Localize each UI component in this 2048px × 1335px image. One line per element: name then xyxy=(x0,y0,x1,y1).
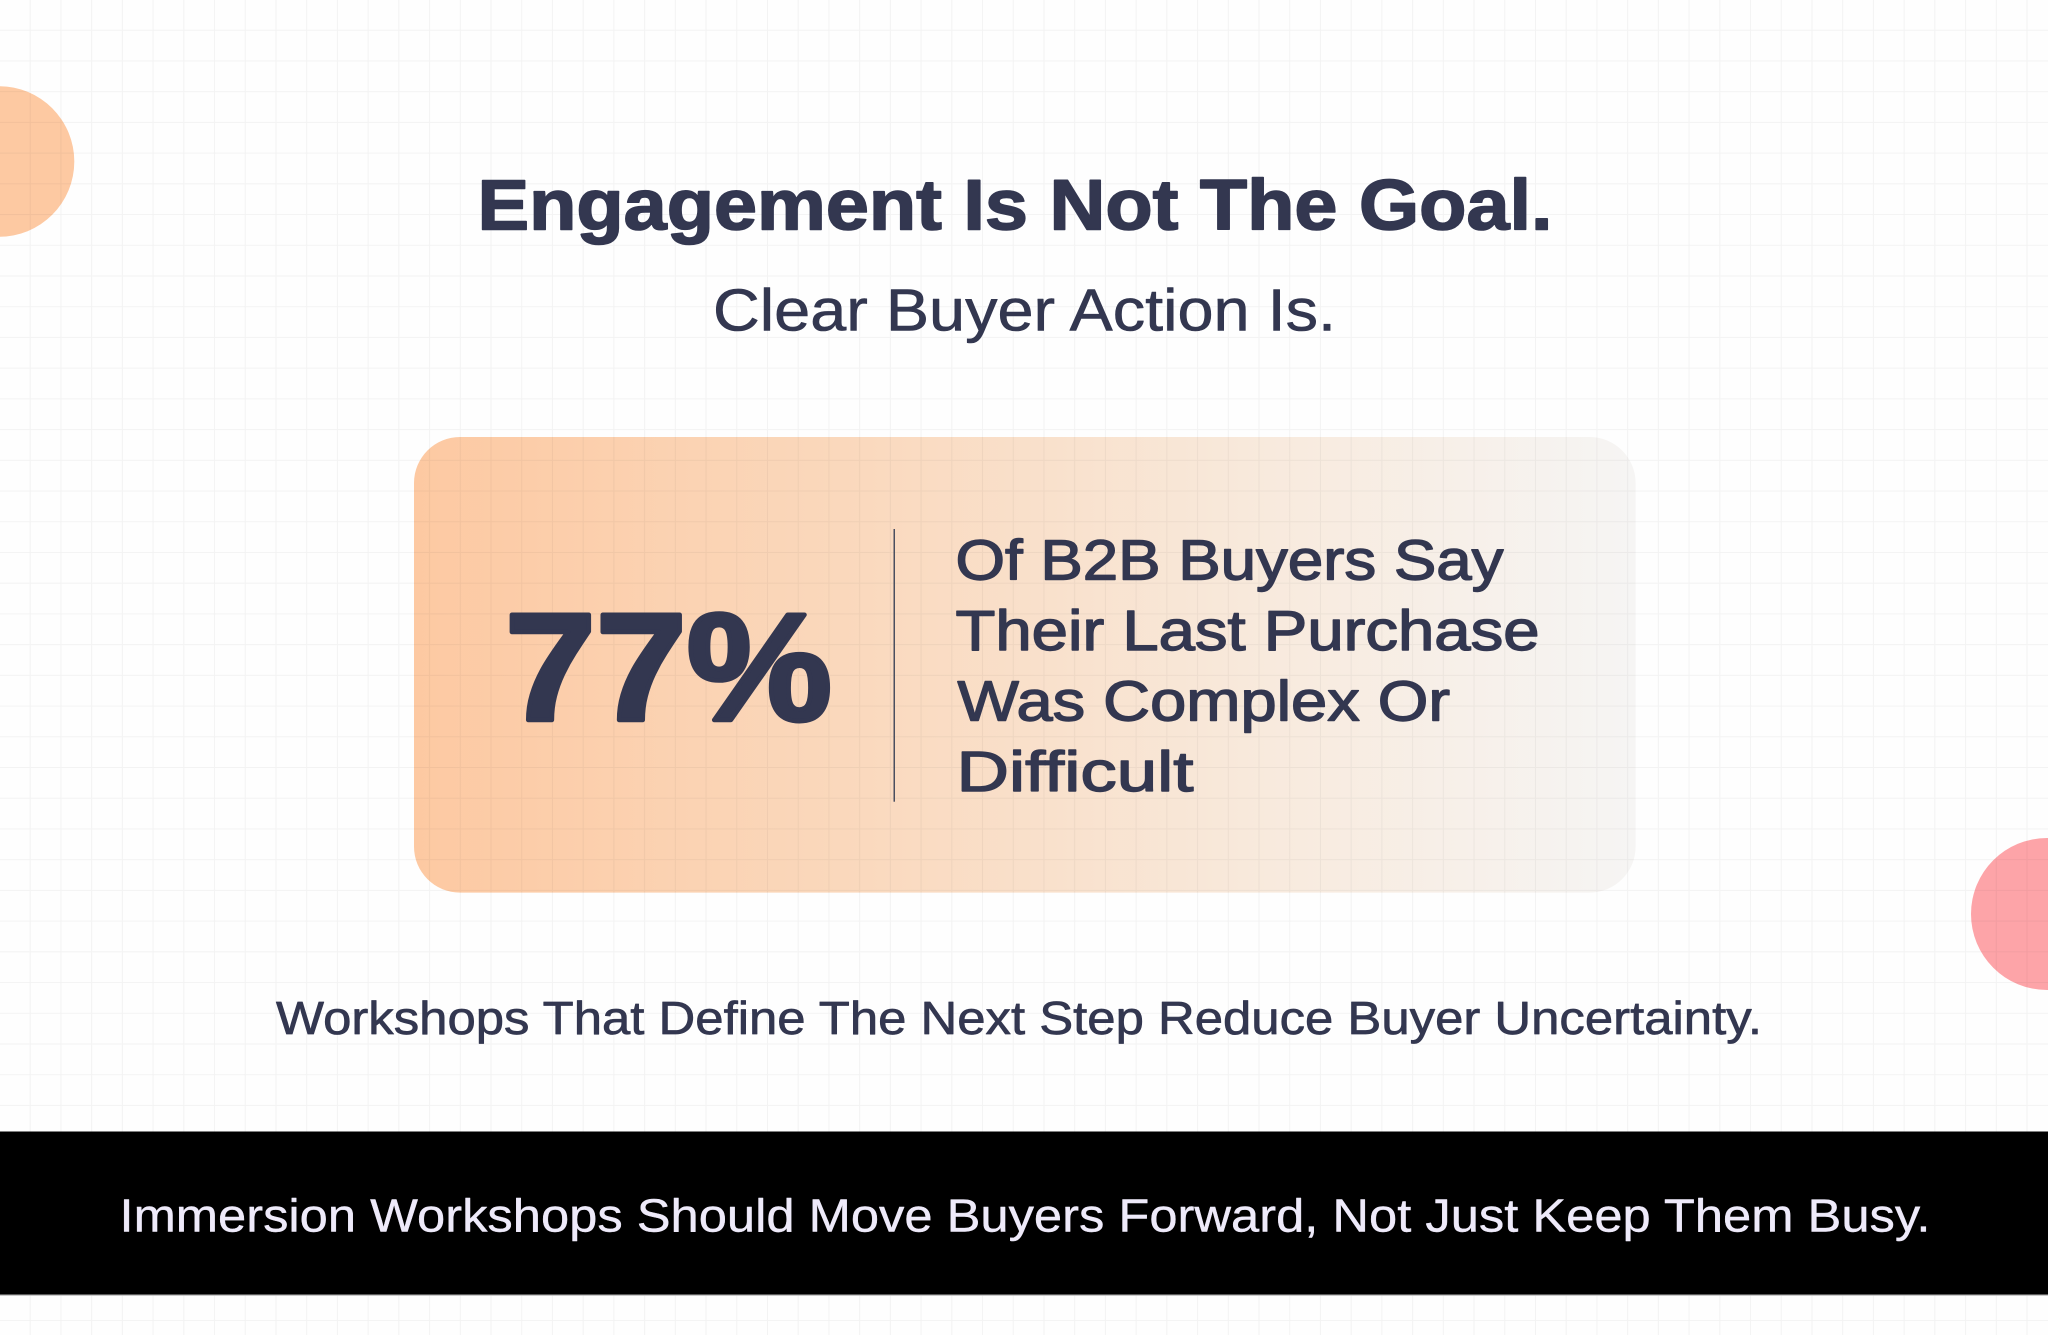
title: Engagement Is Not The Goal. xyxy=(478,166,1552,246)
statistic: 77%: 77% xyxy=(505,582,832,753)
subtitle: Clear Buyer Action Is. xyxy=(713,278,1336,344)
decorative circle: peach xyxy=(0,86,74,237)
line 4: Difficult xyxy=(956,740,1194,804)
line 3: Was Complex Or xyxy=(958,670,1450,734)
statistic description xyxy=(956,528,1540,804)
decorative circle: pink xyxy=(1971,838,2048,990)
divider xyxy=(894,529,895,802)
line 2: Their Last Purchase xyxy=(956,599,1540,663)
supporting statement: Workshops That Define The Next Step Reduce Buyer Uncertainty. xyxy=(276,992,1762,1044)
line 1: Of B2B Buyers Say xyxy=(956,528,1504,592)
footer banner xyxy=(0,1132,2048,1296)
footer text: Immersion Workshops Should Move Buyers Forward, Not Just Keep Them Busy. xyxy=(120,1190,1930,1242)
panel: statistic card xyxy=(414,437,1636,893)
